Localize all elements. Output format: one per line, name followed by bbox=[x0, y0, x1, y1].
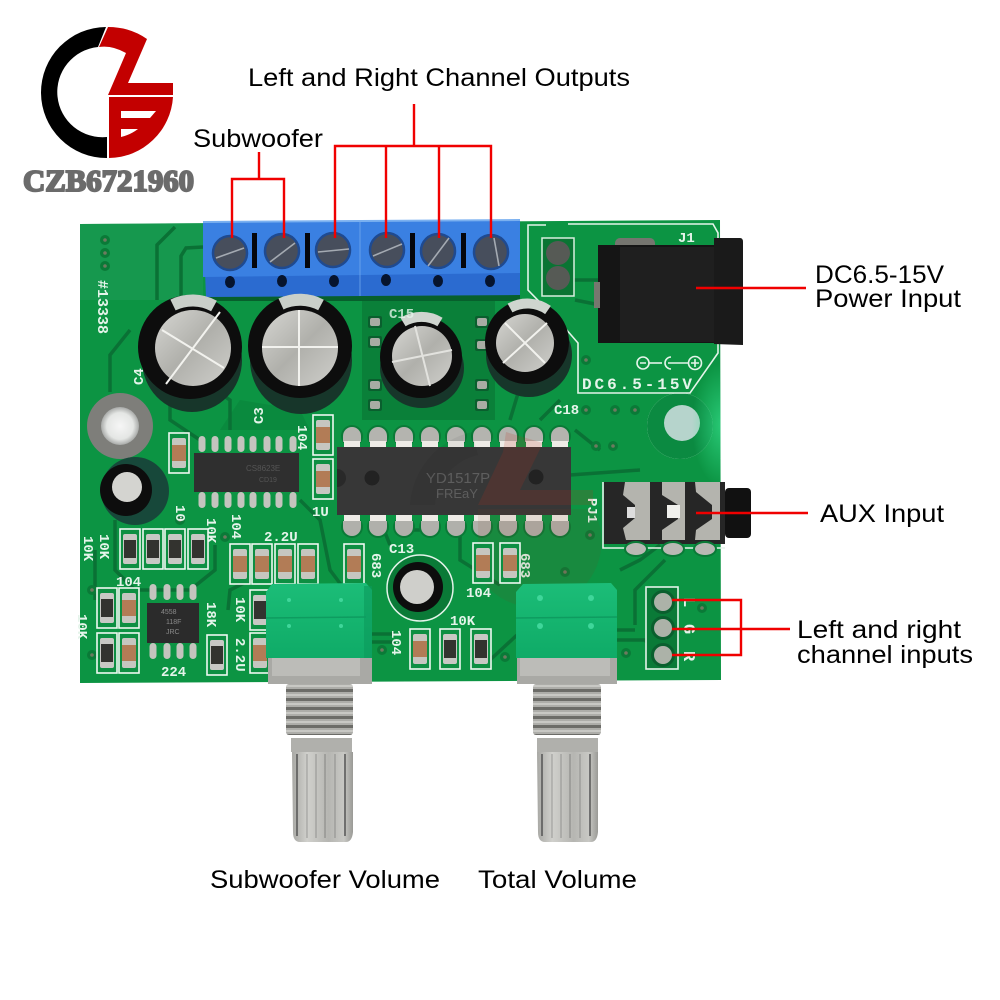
callout: left and right channel inputs: Left and right bbox=[797, 616, 961, 644]
callout: power input bbox=[696, 261, 961, 313]
DIP chip YD1517P: YD1517P bbox=[426, 470, 490, 487]
traces bbox=[95, 227, 665, 660]
silver pads near C15 bbox=[368, 316, 489, 411]
silkscreen labels: C18 bbox=[554, 403, 579, 419]
audio jack bbox=[604, 482, 751, 556]
shaft and knob: total volume bbox=[533, 684, 601, 842]
silkscreen labels: 1U bbox=[312, 505, 329, 521]
op-amp chip 4558 bbox=[147, 584, 199, 659]
circuit board bbox=[73, 220, 752, 683]
silkscreen labels: 10K bbox=[79, 536, 95, 562]
vias bbox=[87, 235, 707, 662]
capacitor C4 bbox=[138, 295, 242, 412]
capacitor labels: C4 bbox=[132, 368, 148, 385]
dark copper area under outputs bbox=[362, 298, 495, 420]
SOIC chip CS8623E: CD19 bbox=[259, 477, 277, 484]
silkscreen labels: L bbox=[678, 597, 697, 607]
silkscreen labels: J1 bbox=[678, 231, 695, 247]
silkscreen labels: 2.2U bbox=[231, 638, 247, 672]
input solder pads bbox=[652, 592, 674, 666]
silkscreen labels: 18K bbox=[202, 602, 218, 628]
capacitor labels bbox=[132, 307, 414, 424]
mounting hole: right bbox=[647, 393, 713, 459]
jack silk line bbox=[603, 482, 725, 548]
silkscreen labels: DC6.5-15V bbox=[582, 376, 692, 394]
capacitor C15 bbox=[380, 316, 464, 408]
op-amp chip 4558: 118F bbox=[166, 619, 181, 626]
power connector silk outline bbox=[528, 224, 718, 393]
surface-mount components bbox=[97, 415, 520, 675]
silkscreen labels: 10K bbox=[231, 597, 247, 623]
potentiometer: total volume bbox=[516, 583, 617, 684]
capacitor labels: C3 bbox=[252, 407, 268, 424]
SOIC chip CS8623E bbox=[194, 436, 299, 508]
logo: CZB mark bbox=[23, 27, 194, 198]
capacitor small left bbox=[100, 457, 169, 525]
silkscreen labels: PJ1 bbox=[583, 498, 599, 523]
capacitor C13 bbox=[387, 555, 453, 621]
silkscreen labels: C13 bbox=[389, 542, 414, 558]
silkscreen labels: 683 bbox=[516, 553, 532, 578]
pin header bbox=[542, 238, 574, 296]
DIP chip YD1517P bbox=[337, 425, 571, 538]
screw terminal block bbox=[203, 220, 520, 301]
logo caption: CZB6721960 bbox=[23, 163, 194, 198]
capacitor labels: C15 bbox=[389, 307, 414, 323]
callout: power input: Power Input bbox=[815, 285, 961, 313]
op-amp chip 4558: 4558 bbox=[161, 609, 177, 616]
silkscreen labels: 104 bbox=[293, 425, 309, 450]
callout: subwoofer: Subwoofer bbox=[193, 125, 323, 153]
silkscreen labels: 104 bbox=[227, 514, 243, 539]
capacitor C18 bbox=[485, 300, 572, 397]
silkscreen labels: 10K bbox=[73, 614, 89, 640]
silkscreen labels bbox=[73, 231, 697, 681]
callout: left and right channel outputs bbox=[248, 64, 630, 238]
polarity symbol bbox=[637, 356, 702, 370]
callout: left and right channel inputs: channel inputs bbox=[797, 641, 973, 669]
silkscreen labels: 10K bbox=[450, 614, 476, 630]
silkscreen labels: #13338 bbox=[93, 280, 110, 334]
silkscreen labels: 10K bbox=[95, 534, 111, 560]
op-amp chip 4558: JRC bbox=[166, 629, 180, 636]
callout: power input: DC6.5-15V bbox=[815, 261, 944, 289]
silkscreen labels: 683 bbox=[367, 553, 383, 578]
silkscreen labels: 104 bbox=[466, 586, 491, 602]
DC power jack bbox=[594, 238, 743, 345]
silkscreen labels: 104 bbox=[387, 630, 403, 655]
callout: left and right channel outputs: Left and Right Channel Outputs bbox=[248, 64, 630, 92]
label: total volume: Total Volume bbox=[478, 866, 637, 894]
silkscreen labels: G bbox=[678, 624, 697, 634]
silkscreen labels: 10K bbox=[202, 518, 218, 544]
SOIC chip CS8623E: CS8623E bbox=[246, 464, 280, 473]
silkscreen labels: 104 bbox=[116, 575, 141, 591]
potentiometer: subwoofer volume bbox=[266, 583, 372, 684]
silkscreen labels: 224 bbox=[161, 665, 186, 681]
mounting hole: left bbox=[87, 393, 153, 459]
label: subwoofer volume: Subwoofer Volume bbox=[210, 866, 440, 894]
input silk outline bbox=[646, 587, 678, 669]
faint watermark bbox=[410, 432, 602, 608]
DIP chip YD1517P: FREaY bbox=[436, 486, 478, 501]
shaft and knob: subwoofer volume bbox=[286, 684, 353, 842]
silkscreen labels: 10 bbox=[171, 505, 187, 522]
screws bbox=[213, 233, 508, 270]
capacitor C3 bbox=[248, 294, 352, 414]
callout: AUX input: AUX Input bbox=[820, 500, 944, 528]
callout: left and right channel inputs bbox=[672, 600, 973, 669]
silkscreen labels: R bbox=[678, 651, 697, 662]
silkscreen labels: 2.2U bbox=[264, 530, 298, 546]
callout: subwoofer bbox=[193, 125, 323, 238]
